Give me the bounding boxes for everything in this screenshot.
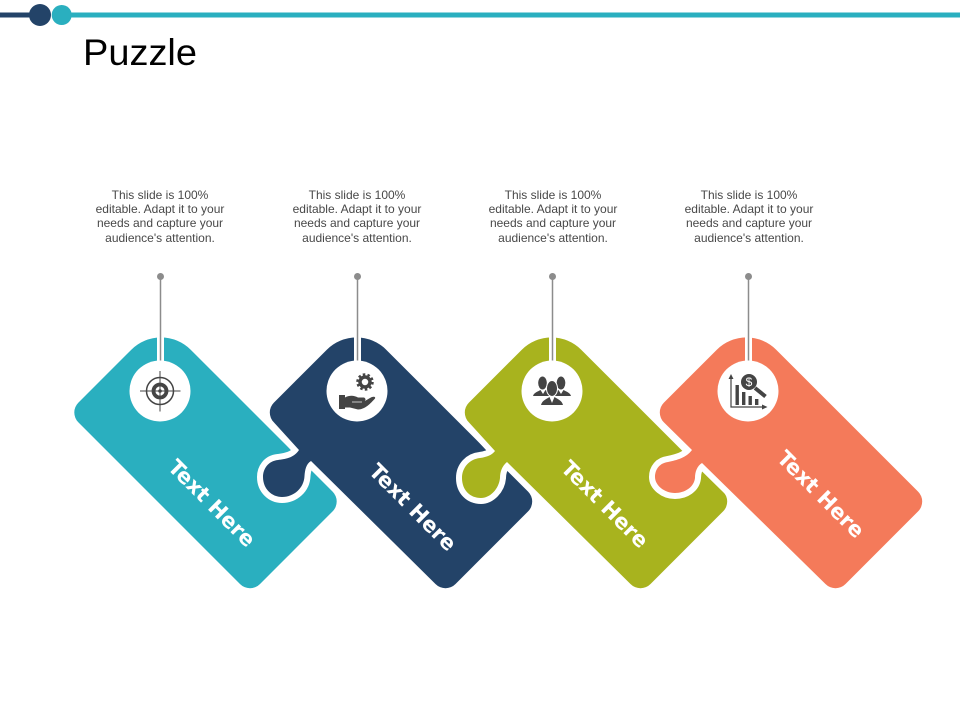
text block 4: needs and capture your: [686, 216, 812, 230]
text block 1: [96, 188, 224, 245]
puzzle piece 3: olive: [462, 337, 727, 588]
piece label 4: Text Here: [772, 446, 869, 543]
text block 3: [489, 188, 617, 245]
icon: chart with magnifier: $: [746, 375, 753, 389]
connector pin 3: [549, 273, 556, 370]
icon: hand with gear: [326, 360, 388, 422]
text block 4: [685, 188, 813, 245]
connector pin 4: [745, 273, 752, 370]
puzzle piece 2: navy: [263, 337, 532, 588]
text block 4: editable. Adapt it to your: [685, 202, 813, 216]
icon: target: [130, 360, 190, 422]
text block 1: audience's attention.: [105, 231, 215, 245]
text block 2: This slide is 100%: [309, 188, 406, 202]
icon: chart with magnifier: [718, 360, 778, 422]
header bar: [0, 4, 960, 26]
text block 2: needs and capture your: [294, 216, 420, 230]
icon: team of people: [522, 360, 582, 422]
piece label 2: Text Here: [364, 459, 461, 556]
text block 2: audience's attention.: [302, 231, 412, 245]
text block 1: needs and capture your: [97, 216, 223, 230]
connector pin 1: [157, 273, 164, 370]
text block 3: editable. Adapt it to your: [489, 202, 617, 216]
text block 2: [293, 188, 421, 245]
puzzle piece 4: coral: [655, 337, 922, 588]
text block 3: needs and capture your: [490, 216, 616, 230]
connector pin 2: [354, 273, 361, 370]
text block 4: This slide is 100%: [701, 188, 798, 202]
piece label 1: Text Here: [163, 455, 260, 552]
text block 3: This slide is 100%: [505, 188, 602, 202]
puzzle piece 1: teal: [74, 337, 337, 588]
text block 2: editable. Adapt it to your: [293, 202, 421, 216]
text block 4: audience's attention.: [694, 231, 804, 245]
text block 1: editable. Adapt it to your: [96, 202, 224, 216]
text block 1: This slide is 100%: [112, 188, 209, 202]
piece label 3: Text Here: [556, 456, 653, 553]
title: Puzzle: [83, 32, 197, 73]
text block 3: audience's attention.: [498, 231, 608, 245]
